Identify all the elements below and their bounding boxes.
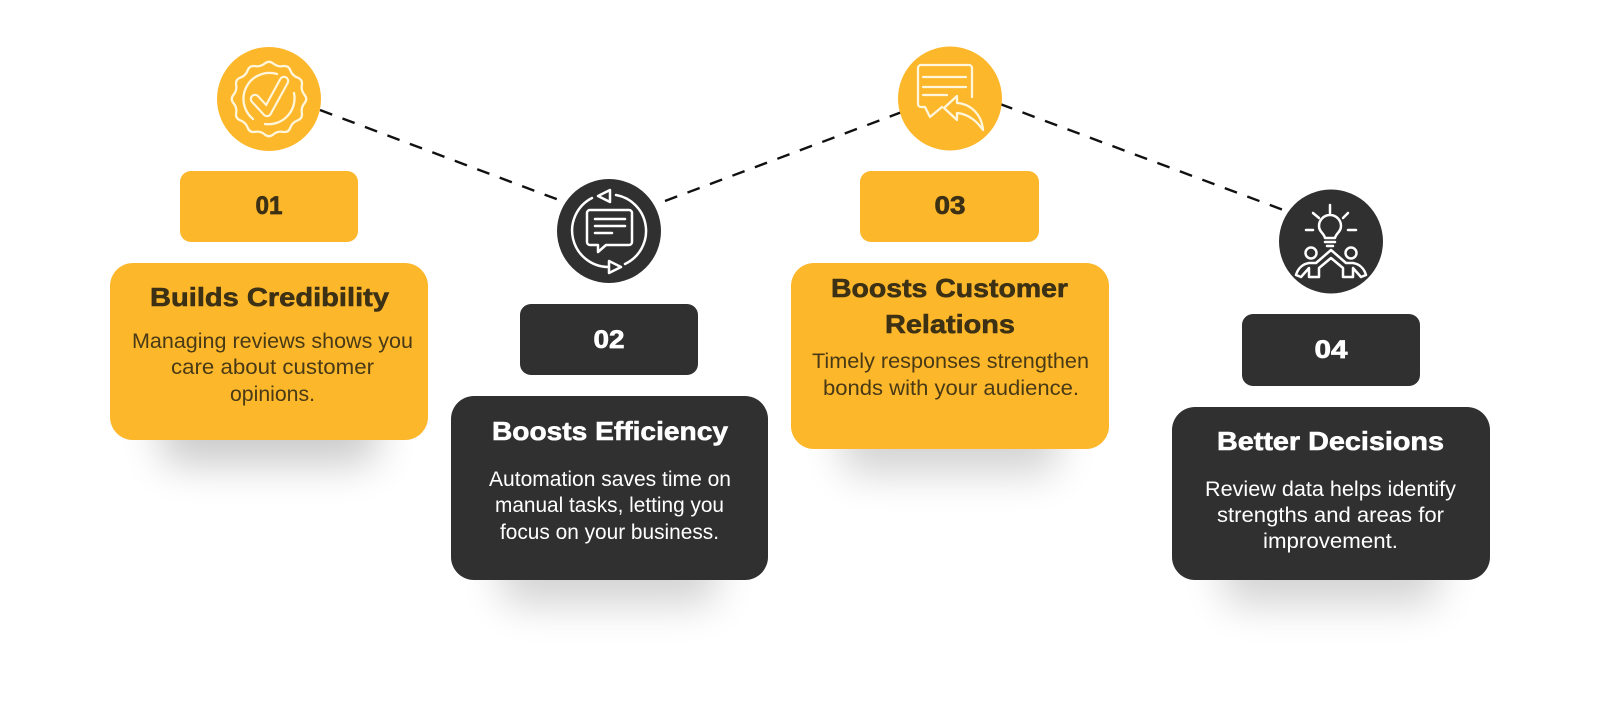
card: boosts efficiency: Automation saves time on	[489, 468, 731, 491]
number badge 02	[520, 304, 698, 375]
card: boosts efficiency	[451, 396, 768, 605]
card: boosts efficiency: focus on your business.	[500, 521, 719, 544]
card: boosts customer relations	[791, 263, 1109, 474]
panel: step 01 builds credibility	[110, 47, 428, 465]
card: boosts customer relations: Relations	[885, 309, 1015, 339]
card: boosts customer relations: Timely responses strengthen	[812, 350, 1089, 373]
card: builds credibility: Builds Credibility	[150, 282, 390, 312]
panel: step 02 boosts efficiency	[451, 179, 768, 605]
dashed connector: step 3 to step 4	[1000, 104, 1286, 211]
icon: chat bubble with cycle arrows	[557, 179, 661, 283]
card: better decisions: improvement.	[1263, 530, 1398, 553]
number badge 01	[180, 171, 358, 242]
number badge 01: 01	[256, 192, 283, 220]
card: builds credibility: Managing reviews shows you	[132, 330, 413, 353]
icon: badge with check mark	[217, 47, 321, 151]
dashed connector: step 1 to step 2	[320, 110, 559, 200]
panel: step 04 better decisions	[1172, 190, 1490, 605]
card: builds credibility: care about customer	[171, 356, 374, 379]
card: boosts efficiency: Boosts Efficiency	[492, 416, 729, 446]
icon: message with reply arrow	[898, 46, 1002, 150]
card: better decisions: Better Decisions	[1217, 426, 1444, 456]
card: boosts efficiency: manual tasks, letting you	[495, 494, 724, 517]
number badge 04	[1242, 314, 1420, 386]
card: builds credibility	[110, 263, 428, 465]
number badge 02: 02	[594, 326, 624, 354]
card: boosts customer relations: Boosts Customer	[831, 273, 1068, 303]
panel: step 03 boosts customer relations	[791, 46, 1109, 474]
card: boosts customer relations: bonds with your audience.	[823, 377, 1079, 400]
number badge 03	[860, 171, 1039, 242]
card: better decisions: strengths and areas for	[1217, 504, 1444, 527]
number badge 03: 03	[934, 192, 966, 220]
dashed connector: step 2 to step 3	[665, 112, 902, 201]
card: builds credibility: opinions.	[230, 383, 315, 406]
icon: lightbulb above two people	[1279, 190, 1383, 294]
card: better decisions	[1172, 407, 1490, 605]
card: better decisions: Review data helps identify	[1205, 478, 1457, 501]
number badge 04: 04	[1314, 336, 1348, 364]
